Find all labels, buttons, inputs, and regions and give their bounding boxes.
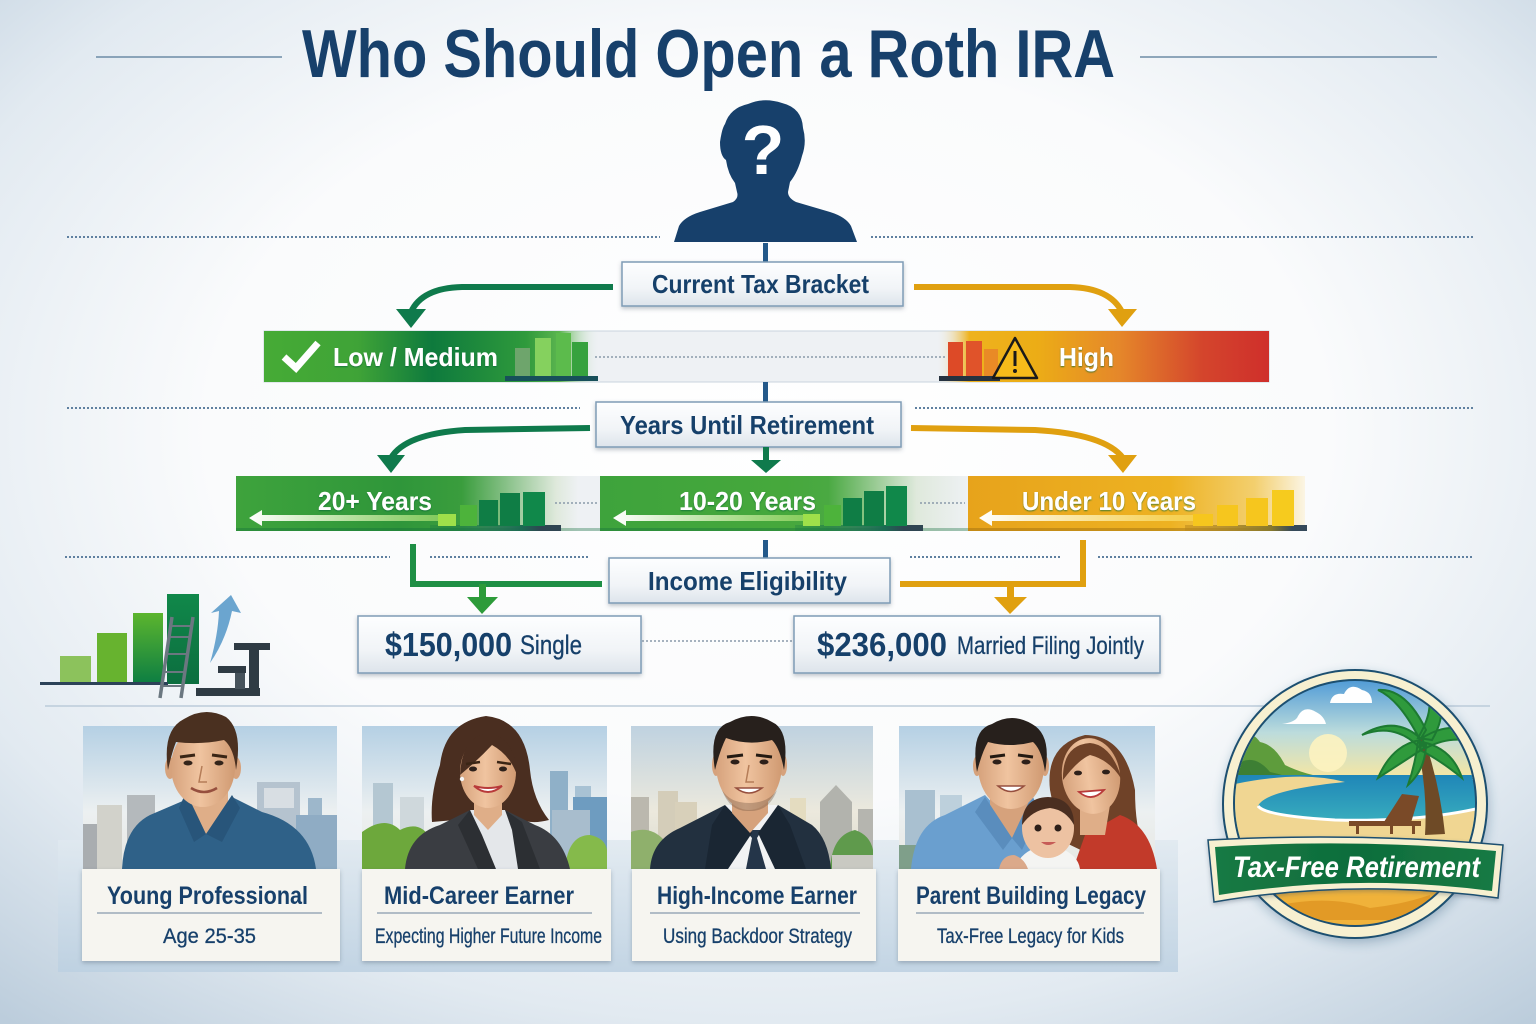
- icon: silhouette with question mark: [674, 100, 857, 242]
- icon: lounge chair: [1349, 794, 1421, 834]
- box: Years Until Retirement: [596, 402, 901, 447]
- panel: under 10 years: [968, 476, 1307, 531]
- subtext: Age 25-35: [163, 925, 256, 948]
- connector: years to income: [763, 540, 768, 558]
- photo: family: [899, 718, 1157, 869]
- card: Mid-Career Earner: [362, 716, 611, 961]
- arrow: years to under 10: [911, 428, 1137, 473]
- clouds: [1330, 687, 1372, 703]
- subtext: Expecting Higher Future Income: [375, 925, 602, 948]
- card: Young Professional: [82, 712, 340, 961]
- heading: Mid-Career Earner: [384, 882, 574, 910]
- label: under 10 years: Under 10 Years: [1022, 486, 1196, 516]
- icon: silhouette with question mark: ?: [742, 111, 784, 189]
- panel: persona band: [58, 840, 1178, 972]
- connector: dotted between amounts: [642, 640, 792, 642]
- arrow: tax bracket to high: [914, 287, 1137, 327]
- banner: Tax-Free Retirement: [1233, 851, 1482, 884]
- dotted dividers row 1: [67, 236, 1473, 238]
- panel: tax bracket bar: [264, 331, 1269, 382]
- box: $150,000 Single: [358, 616, 641, 673]
- label panel: [632, 869, 876, 961]
- photo: high-income earner: [631, 716, 873, 869]
- arrow: white left arrow: [249, 510, 438, 526]
- banner: [1208, 837, 1503, 902]
- label panel: [898, 869, 1160, 961]
- photo: young professional: [83, 712, 337, 869]
- chart: bars: [795, 486, 923, 531]
- heading: Parent Building Legacy: [916, 882, 1146, 910]
- arrow: tax bracket to low / medium: [396, 287, 613, 328]
- box: Current Tax Bracket: [622, 262, 903, 306]
- icon: growth chart with ladder and steps: [40, 594, 270, 698]
- scene: beach: [1230, 675, 1480, 935]
- divider above personas: [45, 705, 1490, 707]
- icon: warning triangle: [993, 338, 1037, 378]
- arrow: white left arrow: [613, 510, 803, 526]
- panel: 20+ years: [236, 476, 600, 531]
- box: Income Eligibility: [609, 558, 890, 603]
- arrow: years to 10-20: [751, 447, 781, 473]
- connector: silhouette to tax bracket: [763, 243, 768, 262]
- card: High-Income Earner: [631, 716, 876, 961]
- box: $150,000 Single: $150,000: [385, 626, 512, 663]
- card: Parent Building Legacy: [898, 718, 1160, 961]
- box: Income Eligibility: Income Eligibility: [648, 566, 847, 596]
- dotted dividers row 2: [67, 407, 1473, 409]
- label: high: High: [1059, 342, 1114, 372]
- box: Years Until Retirement: Years Until Retirement: [620, 410, 874, 440]
- heading: High-Income Earner: [657, 882, 857, 910]
- photo: mid-career earner: [362, 716, 607, 869]
- badge: Tax-Free Retirement: [1208, 669, 1503, 942]
- box: $236,000 Married Filing Jointly: [794, 616, 1160, 673]
- chart: low medium bars: [505, 333, 598, 381]
- label panel: [362, 869, 611, 961]
- chart: bars: [1185, 490, 1307, 531]
- box: $150,000 Single: Single: [520, 630, 582, 660]
- arrow: years to 20+: [377, 428, 590, 473]
- arrow: income to single: [413, 544, 602, 614]
- title: Who Should Open a Roth IRA: [302, 16, 1115, 92]
- label: low / medium: Low / Medium: [333, 342, 498, 372]
- panel: 10-20 years: [600, 476, 968, 531]
- box: $236,000 Married Filing Jointly: $236,000: [817, 626, 947, 663]
- box: Current Tax Bracket: Current Tax Bracket: [652, 269, 869, 299]
- heading: Young Professional: [107, 882, 308, 910]
- chart: bars: [430, 492, 561, 531]
- arrow: white left arrow: [979, 510, 1193, 526]
- connector: bar to years: [763, 382, 768, 402]
- subtext: Tax-Free Legacy for Kids: [937, 925, 1124, 948]
- label: 10-20 years: 10-20 Years: [679, 486, 816, 516]
- arrow: income to married: [900, 540, 1083, 614]
- icon: palm tree: [1362, 688, 1464, 835]
- chart: high bars: [939, 341, 1000, 381]
- box: $236,000 Married Filing Jointly: Married Filing Jointly: [957, 632, 1144, 660]
- icon: check mark: [284, 343, 318, 368]
- label panel: [82, 869, 340, 961]
- dotted dividers row 3: [65, 556, 1473, 558]
- subtext: Using Backdoor Strategy: [663, 925, 852, 948]
- label: 20+ years: 20+ Years: [318, 486, 432, 516]
